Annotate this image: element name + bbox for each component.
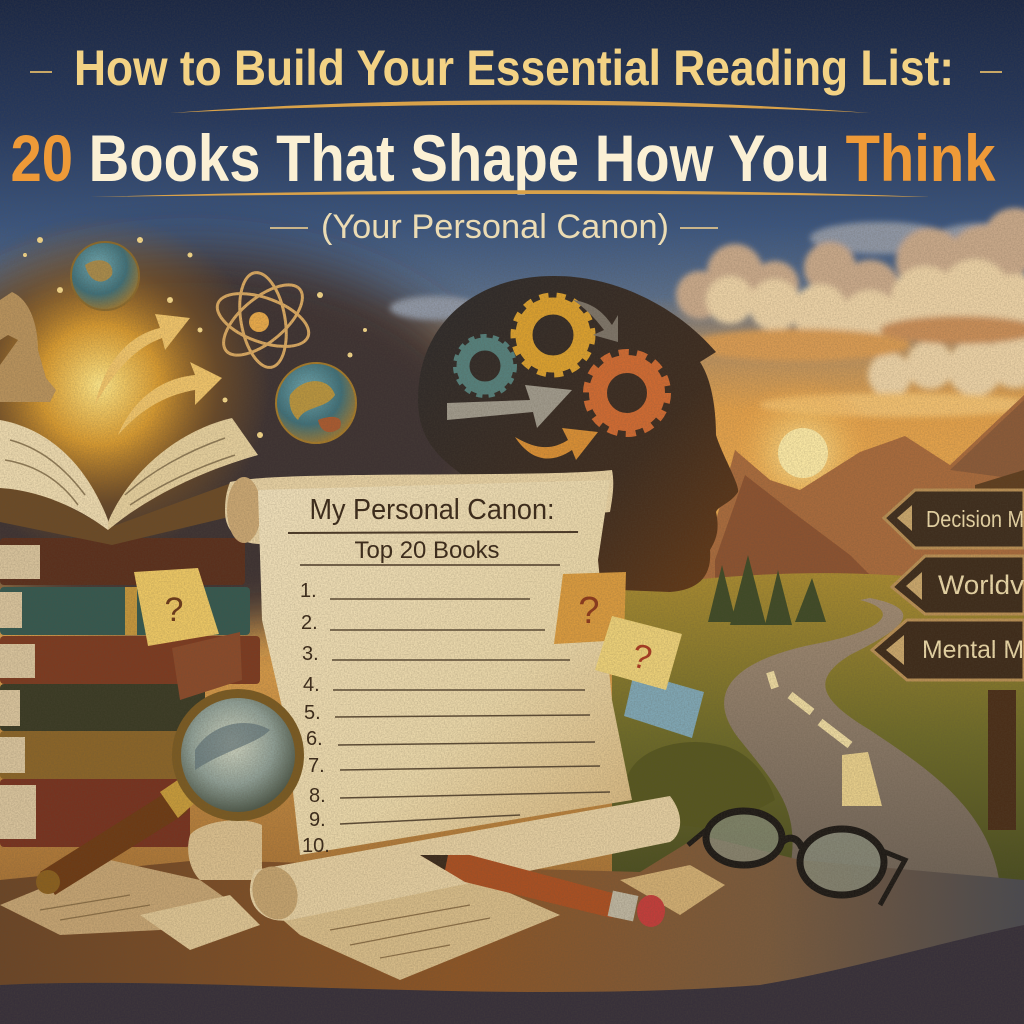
- book glow: [0, 215, 270, 555]
- open book: [0, 418, 258, 545]
- numbered list: 7.: [308, 755, 325, 777]
- sign: mental: [872, 620, 1024, 680]
- numbered list: 1.: [300, 580, 317, 602]
- trees: [708, 555, 826, 625]
- icon: arrow dark: [573, 300, 618, 342]
- icon: gear orange: [587, 353, 667, 433]
- icon: gear teal: [456, 337, 514, 395]
- left dark haze: [0, 250, 500, 630]
- sticky note yellow: ?: [628, 637, 655, 678]
- icon: arrow orange: [515, 428, 598, 460]
- sign: worldview: Worldv: [938, 570, 1024, 600]
- numbered list: 5.: [304, 702, 321, 724]
- title line 2: 20 Books That Shape How You Think: [10, 121, 996, 195]
- head silhouette with gears: [418, 276, 738, 620]
- sticky note left: ?: [165, 591, 183, 629]
- rolled scroll: [245, 796, 680, 926]
- numbered list: 6.: [306, 728, 323, 750]
- sign: mental: Mental M: [922, 636, 1024, 664]
- book: maroon: [0, 779, 190, 847]
- scroll subtitle: Top 20 Books: [354, 537, 500, 564]
- sticky note orange: [554, 572, 626, 644]
- mountains: [700, 395, 1024, 590]
- numbered list: 3.: [302, 643, 319, 665]
- numbered list: [300, 580, 610, 857]
- winding road: [724, 598, 1000, 885]
- icon: large globe: [276, 363, 356, 443]
- scroll top roll: [225, 470, 613, 544]
- sun: [728, 378, 878, 528]
- numbered list: 2.: [301, 612, 318, 634]
- sparkles: [23, 237, 367, 438]
- landscape field: [612, 573, 1024, 900]
- sticky note blue: [624, 672, 704, 738]
- scroll title: My Personal Canon:: [310, 494, 554, 526]
- pencil: [420, 855, 665, 927]
- sign: decision: [884, 490, 1024, 548]
- sticky note yellow: [595, 616, 682, 690]
- sticky note orange: ?: [578, 590, 600, 632]
- book: dark green: [0, 684, 205, 731]
- title line 3: (Your Personal Canon): [321, 208, 669, 246]
- book: olive: [0, 731, 190, 779]
- bushes: [625, 742, 775, 830]
- book: teal: [0, 587, 250, 635]
- sign: worldview: [892, 556, 1024, 614]
- foreground ground: [0, 835, 1024, 1024]
- clouds: [390, 208, 1024, 417]
- magnifying glass: [36, 689, 304, 895]
- small rolled paper: [188, 820, 262, 880]
- numbered list: 10.: [302, 835, 330, 857]
- scroll sheet: [258, 480, 632, 855]
- scroll: [225, 470, 632, 857]
- signpost: [872, 470, 1024, 830]
- icon: arrow grey: [447, 385, 572, 428]
- glasses: [688, 811, 905, 905]
- numbered list: 8.: [309, 785, 326, 807]
- icon: golden arrows: [95, 314, 222, 435]
- icon: atom: [210, 269, 316, 371]
- sticky notes right: [554, 572, 704, 738]
- numbered list: 9.: [309, 809, 326, 831]
- numbered list: 4.: [303, 674, 320, 696]
- book: green: [0, 538, 245, 585]
- sticky note left: [134, 568, 219, 646]
- icon: small globe: [71, 242, 139, 310]
- loose papers: [0, 860, 725, 980]
- title block: [10, 40, 1002, 246]
- icon: gear yellow: [514, 296, 592, 374]
- book: red: [0, 636, 260, 684]
- stack of books: [0, 538, 260, 847]
- icon: chess knight: [0, 292, 56, 402]
